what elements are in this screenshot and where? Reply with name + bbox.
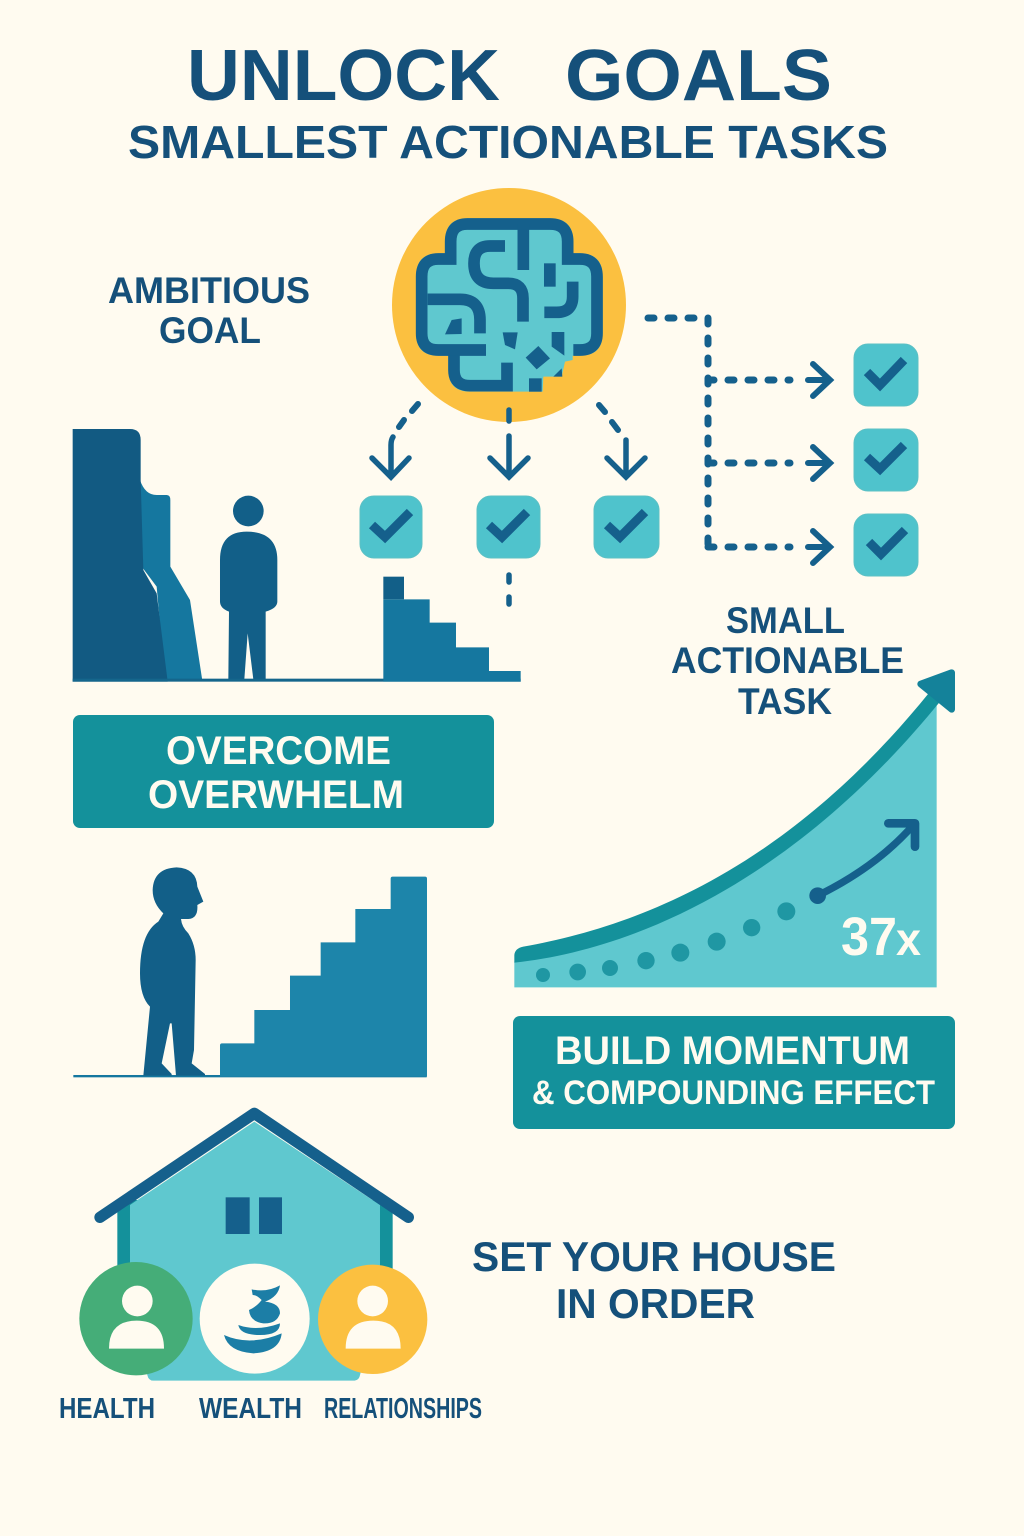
icon: brain in yellow circle: [392, 188, 626, 422]
label: small actionable task: ACTIONABLE: [671, 640, 904, 681]
cliff: [73, 429, 202, 682]
icon: check box bottom right: [854, 514, 918, 576]
house walls: [117, 1200, 393, 1270]
dashed connector below middle task: [506, 575, 512, 604]
person profile: [140, 867, 205, 1076]
ground line: [73, 679, 521, 682]
label: ambitious goal: [108, 270, 310, 351]
banner: overcome overwhelm: OVERCOME: [166, 729, 391, 773]
area under curve: [514, 703, 937, 987]
person: [220, 496, 277, 679]
illustration: person facing cliff and small steps: [73, 429, 521, 682]
title: [187, 36, 832, 116]
curve arrow: [514, 673, 952, 963]
label: small actionable task: [671, 600, 904, 722]
banner: overcome overwhelm: OVERWHELM: [148, 773, 404, 817]
icon: check box left: [360, 496, 422, 558]
label: ambitious goal: GOAL: [159, 310, 261, 351]
arrow: brain to right task: [599, 405, 645, 477]
staircase: [220, 877, 427, 1077]
banner: build momentum: BUILD MOMENTUM: [555, 1029, 910, 1073]
ground line: [73, 1075, 427, 1077]
arrow: brain to left task: [372, 404, 418, 477]
label: small actionable task: SMALL: [726, 600, 845, 641]
icon: wealth: [200, 1264, 310, 1374]
label: 37x: x: [896, 913, 921, 965]
banner: build momentum: [513, 1016, 955, 1129]
roof: [100, 1113, 408, 1217]
window: [226, 1197, 282, 1234]
subtitle: SMALLEST ACTIONABLE TASKS: [128, 116, 888, 168]
icon: check box mid right: [854, 429, 918, 491]
banner: overcome overwhelm: [73, 715, 494, 828]
chart: compounding growth curve: [514, 673, 952, 987]
icon: check box middle: [477, 496, 540, 558]
icon: relationships: [318, 1265, 427, 1374]
label: health: HEALTH: [59, 1393, 155, 1425]
label: 37x: 37: [841, 907, 897, 967]
heading: set your house in order: SET YOUR HOUSE: [472, 1233, 836, 1280]
small arrow: [809, 823, 915, 904]
heading: set your house in order: IN ORDER: [556, 1280, 755, 1327]
illustration: house with three life areas: [79, 1113, 427, 1381]
label: ambitious goal: AMBITIOUS: [108, 270, 310, 311]
title: GOALS: [565, 36, 832, 116]
label: wealth: WEALTH: [199, 1393, 302, 1425]
house front: [130, 1122, 380, 1381]
heading: set your house in order: [472, 1233, 836, 1327]
arrow: dashed branching connector to right tasks: [648, 318, 830, 563]
label: small actionable task: TASK: [738, 681, 832, 722]
icon: health: [79, 1262, 193, 1375]
progress dots: [536, 902, 795, 982]
illustration: person before staircase: [73, 867, 427, 1077]
small steps: [383, 577, 521, 682]
label: relationships: RELATIONSHIPS: [324, 1393, 482, 1425]
banner: build momentum: & COMPOUNDING EFFECT: [532, 1074, 935, 1112]
title: UNLOCK: [187, 36, 500, 116]
icon: check box right: [594, 496, 659, 558]
arrow: brain to middle task: [490, 410, 528, 477]
icon: check box top right: [854, 344, 918, 406]
